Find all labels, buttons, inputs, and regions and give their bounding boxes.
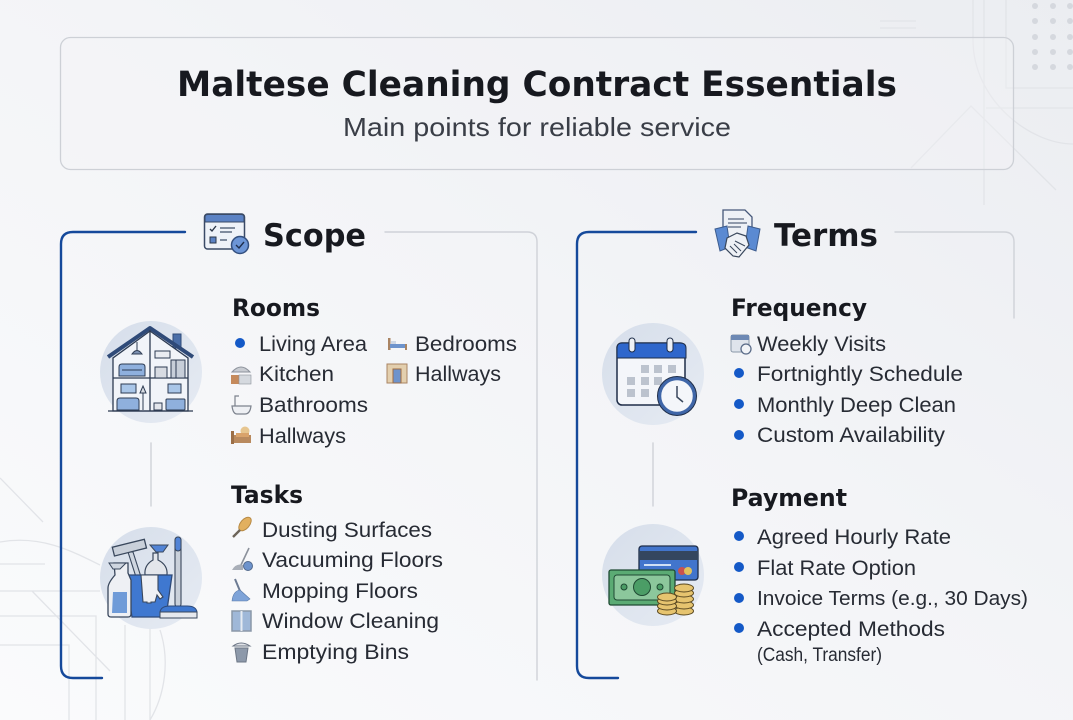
icon: calendar <box>602 323 704 425</box>
icon: contract handshake <box>715 210 760 257</box>
bullet: fortnightly <box>734 368 744 378</box>
block: payment <box>731 484 1028 666</box>
text: bedrooms: Bedrooms <box>415 333 517 356</box>
icon: mop <box>232 579 250 601</box>
text: living area: Living Area <box>259 333 367 356</box>
text: fortnightly schedule: Fortnightly Schedule <box>757 363 963 386</box>
text: cash, transfer: (Cash, Transfer) <box>757 645 882 666</box>
block: rooms <box>231 294 517 448</box>
icon: small calendar <box>731 335 751 354</box>
bullet: invoice <box>734 593 744 603</box>
text: bathrooms: Bathrooms <box>259 394 368 417</box>
panel frame: terms <box>577 232 1014 678</box>
heading: frequency: Frequency <box>731 294 867 322</box>
heading: terms: Terms <box>774 218 878 254</box>
icon: duster <box>233 515 254 537</box>
icon: money and card <box>602 524 704 626</box>
icon: bed blue <box>388 338 407 350</box>
icon: vacuum <box>232 548 252 570</box>
text: monthly deep clean: Monthly Deep Clean <box>757 394 956 417</box>
header panel <box>60 38 1014 170</box>
icon: bathtub <box>232 396 251 414</box>
text: emptying bins: Emptying Bins <box>262 641 409 664</box>
text: mopping floors: Mopping Floors <box>262 580 418 603</box>
text: vacuuming floors: Vacuuming Floors <box>262 549 443 572</box>
bullet: monthly <box>734 399 744 409</box>
icon: house <box>100 321 202 423</box>
icon: kitchen <box>231 367 251 384</box>
bullet: flat <box>734 562 744 572</box>
title: Maltese Cleaning Contract Essentials <box>177 65 897 105</box>
heading: payment: Payment <box>731 484 847 512</box>
block: frequency <box>731 294 963 447</box>
bullet: living area <box>235 338 245 348</box>
icon: checklist <box>204 214 248 254</box>
text: hallways second column: Hallways <box>415 363 501 386</box>
panel: terms <box>577 210 1028 678</box>
text: agreed hourly rate: Agreed Hourly Rate <box>757 526 951 549</box>
text: custom availability: Custom Availability <box>757 424 946 447</box>
text: weekly visits: Weekly Visits <box>757 333 886 356</box>
icon: bed <box>231 426 251 444</box>
text: invoice terms: Invoice Terms (e.g., 30 Days) <box>757 587 1028 610</box>
subtitle: Main points for reliable service <box>343 112 731 142</box>
text: window cleaning: Window Cleaning <box>262 610 439 633</box>
panel: scope <box>61 214 537 680</box>
icon: bin <box>233 643 250 662</box>
text: accepted methods: Accepted Methods <box>757 618 945 641</box>
text: kitchen: Kitchen <box>259 363 334 386</box>
text: dusting surfaces: Dusting Surfaces <box>262 519 432 542</box>
heading: rooms: Rooms <box>232 294 320 322</box>
bullet: hourly <box>734 531 744 541</box>
icon: window <box>232 611 251 631</box>
text: flat rate option: Flat Rate Option <box>757 557 916 580</box>
icon: hallway <box>387 364 407 383</box>
heading: tasks: Tasks <box>231 481 303 509</box>
bullet: custom <box>734 430 744 440</box>
icon: cleaning supplies <box>100 527 202 629</box>
block: tasks <box>231 481 443 664</box>
heading: scope: Scope <box>263 218 366 254</box>
bullet: accepted <box>734 623 744 633</box>
text: hallways: Hallways <box>259 425 346 448</box>
panel frame: scope <box>61 232 537 680</box>
